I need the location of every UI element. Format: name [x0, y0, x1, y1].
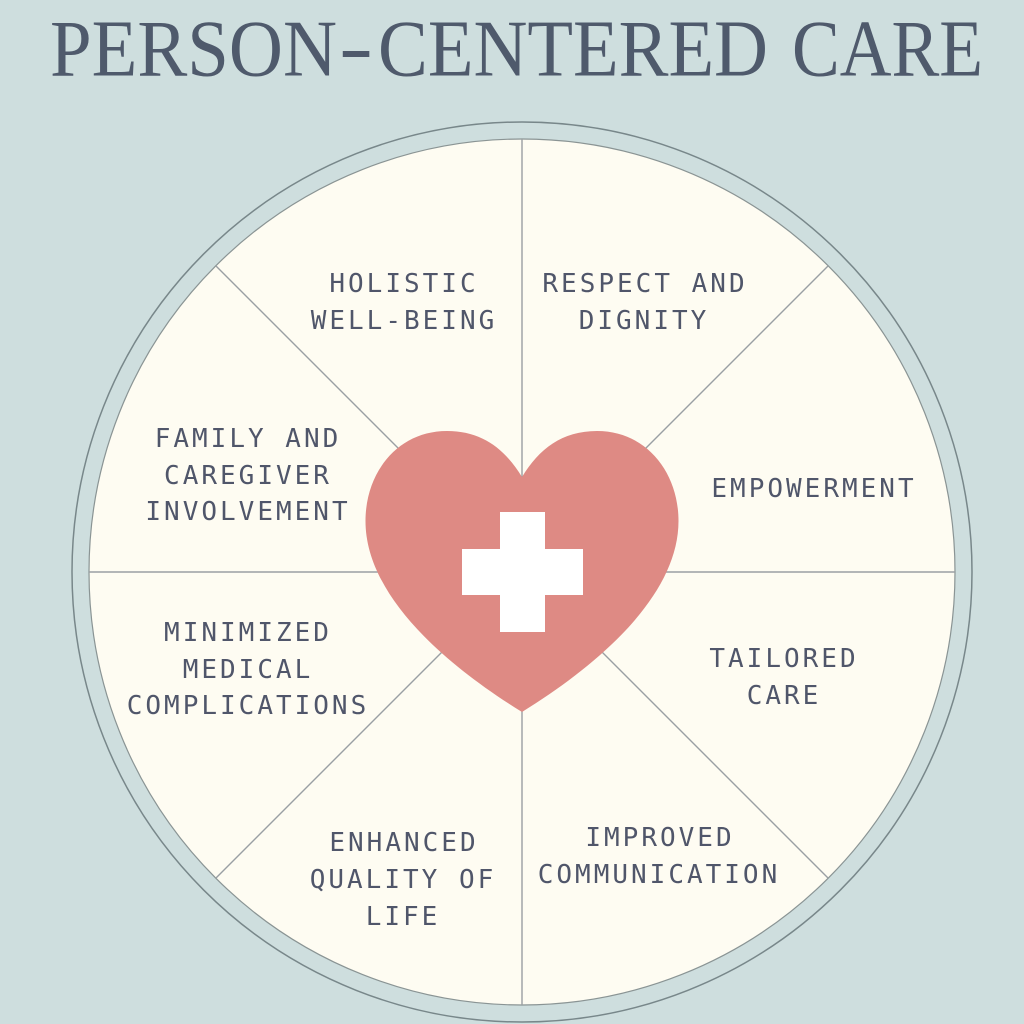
label: tailored care [709, 644, 859, 711]
title: CENTERED [378, 6, 768, 94]
label: holistic well-being [311, 269, 497, 336]
label: respect and dignity: RESPECT AND [542, 269, 748, 299]
label: minimized medical complications: MINIMIZED [164, 618, 332, 648]
label: enhanced quality of life: QUALITY OF [310, 865, 496, 895]
label: family and caregiver involvement: INVOLVEMENT [145, 497, 351, 527]
label: minimized medical complications: MEDICAL [183, 655, 313, 685]
label: respect and dignity [542, 269, 748, 336]
medical cross [462, 512, 583, 632]
label: improved communication: IMPROVED [585, 823, 735, 853]
label: empowerment: EMPOWERMENT [711, 474, 917, 504]
heart [366, 431, 678, 712]
label: improved communication: COMMUNICATION [538, 860, 780, 890]
label: holistic well-being: WELL-BEING [311, 306, 497, 336]
label: improved communication [538, 823, 780, 890]
label: family and caregiver involvement: CAREGIVER [164, 461, 332, 491]
title [50, 3, 983, 94]
label: family and caregiver involvement [145, 424, 351, 527]
label: respect and dignity: DIGNITY [579, 306, 709, 336]
title: - [339, 3, 373, 91]
label: enhanced quality of life: LIFE [366, 902, 440, 932]
label: enhanced quality of life [310, 828, 496, 932]
label: tailored care: TAILORED [709, 644, 859, 674]
title: PERSON [50, 6, 337, 94]
inner cream disc [89, 139, 955, 1005]
label: minimized medical complications: COMPLICATIONS [127, 691, 369, 721]
icon: heart with cross [366, 431, 678, 712]
label: tailored care: CARE [747, 681, 821, 711]
title: CARE [792, 6, 983, 94]
label: enhanced quality of life: ENHANCED [329, 828, 479, 858]
outer ring [72, 122, 972, 1022]
wheel [72, 122, 972, 1022]
label: holistic well-being: HOLISTIC [329, 269, 479, 299]
label: family and caregiver involvement: FAMILY AND [155, 424, 341, 454]
segment dividers [89, 139, 955, 1005]
label: minimized medical complications [127, 618, 369, 721]
